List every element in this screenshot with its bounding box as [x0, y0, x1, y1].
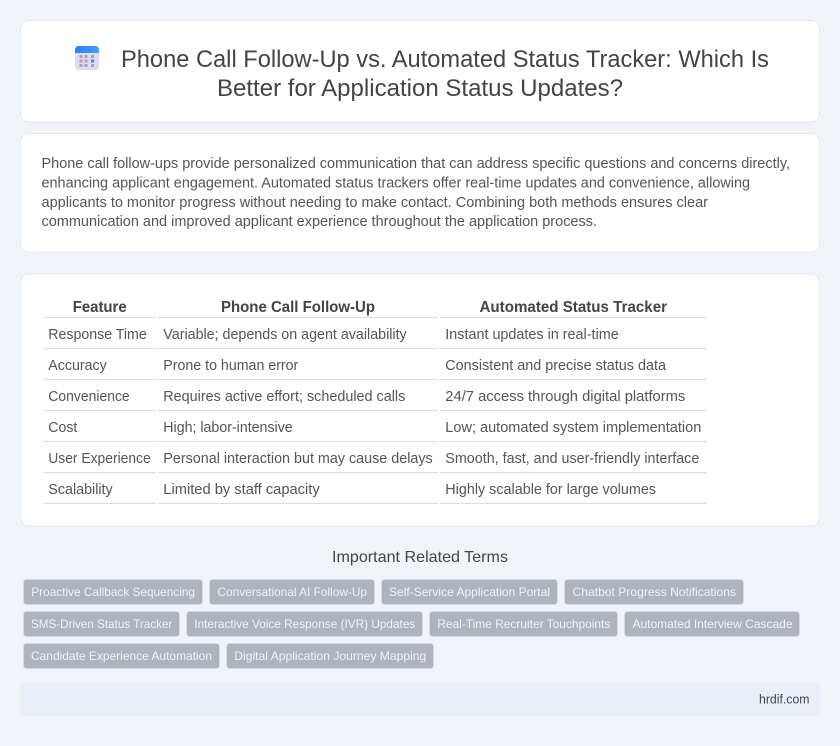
table row: scalability: Scalability — [48, 482, 113, 498]
table row: convenience: 24/7 access through digital platforms — [445, 389, 685, 405]
text block: summary: applicants to monitor progress without needing to make contact. Combining both methods ensures clear — [42, 195, 708, 211]
table row: accuracy: Consistent and precise status data — [445, 358, 666, 374]
table row: response time: Response Time — [48, 327, 147, 343]
table row: response time — [48, 327, 619, 343]
table row: accuracy: Accuracy — [48, 358, 107, 374]
text block: summary: Phone call follow-ups provide personalized communication that can address specific questions and concerns directly, — [42, 156, 790, 172]
chip: Proactive Callback Sequencing — [24, 580, 202, 604]
table row: scalability — [48, 482, 656, 498]
chip: Chatbot Progress Notifications: Chatbot Progress Notifications — [572, 585, 736, 599]
chip: Conversational AI Follow-Up — [210, 580, 374, 604]
chip: Self-Service Application Portal: Self-Service Application Portal — [389, 585, 550, 599]
title — [121, 46, 769, 102]
table header row: Automated Status Tracker — [480, 299, 667, 316]
icon: calendar — [75, 46, 99, 70]
title: Phone Call Follow-Up vs. Automated Status Tracker: Which Is — [121, 46, 769, 73]
table row: scalability: Highly scalable for large volumes — [445, 482, 656, 498]
table row: accuracy: Prone to human error — [163, 358, 298, 374]
footer source text: hrdif.com — [759, 692, 810, 706]
table row: cost: Low; automated system implementation — [445, 420, 701, 436]
text block: summary: enhancing applicant engagement. Automated status trackers offer real-time updates and convenience, allowing — [42, 176, 750, 192]
table row: user experience: Smooth, fast, and user-friendly interface — [445, 451, 699, 467]
chip: Self-Service Application Portal — [382, 580, 558, 604]
chip: Interactive Voice Response (IVR) Updates — [186, 612, 422, 636]
table header row: Phone Call Follow-Up — [221, 299, 375, 316]
chip: Automated Interview Cascade: Automated Interview Cascade — [632, 617, 793, 631]
text block: summary: communication and improved applicant experience throughout the application process. — [42, 214, 597, 230]
table row: cost: Cost — [48, 420, 77, 436]
chip: Interactive Voice Response (IVR) Updates: Interactive Voice Response (IVR) Updates — [194, 617, 415, 631]
chip: Candidate Experience Automation — [24, 644, 220, 668]
table row: response time: Instant updates in real-time — [445, 327, 619, 343]
heading: important related terms: Important Related Terms — [332, 549, 508, 566]
table row: user experience: User Experience — [48, 451, 151, 467]
table header row — [73, 299, 667, 316]
table row: cost: High; labor-intensive — [163, 420, 293, 436]
table row: user experience: Personal interaction but may cause delays — [163, 451, 433, 467]
panel: comparison table — [20, 274, 820, 526]
chip: Real-Time Recruiter Touchpoints — [430, 612, 618, 636]
table row: convenience — [48, 389, 685, 405]
title: Better for Application Status Updates? — [217, 75, 623, 102]
table row: user experience — [48, 451, 699, 467]
chip: Real-Time Recruiter Touchpoints: Real-Time Recruiter Touchpoints — [437, 617, 610, 631]
chip: Conversational AI Follow-Up: Conversational AI Follow-Up — [218, 585, 367, 599]
chip: SMS-Driven Status Tracker — [24, 612, 180, 636]
chip: SMS-Driven Status Tracker: SMS-Driven Status Tracker — [31, 617, 172, 631]
panel: header — [20, 20, 820, 122]
table row: cost — [48, 420, 701, 436]
table header row: Feature — [73, 299, 127, 316]
chip: Chatbot Progress Notifications — [564, 580, 744, 604]
text block: summary — [42, 156, 790, 230]
chip: Digital Application Journey Mapping: Digital Application Journey Mapping — [234, 649, 426, 663]
footer bar — [20, 682, 820, 716]
table row: accuracy — [48, 358, 666, 374]
table row: scalability: Limited by staff capacity — [163, 482, 321, 498]
chip: Candidate Experience Automation: Candidate Experience Automation — [31, 649, 212, 663]
panel: related term chips — [24, 580, 800, 668]
table row: response time: Variable; depends on agent availability — [163, 327, 407, 343]
table row: convenience: Requires active effort; scheduled calls — [163, 389, 405, 405]
chip: Automated Interview Cascade — [624, 612, 800, 636]
table row: convenience: Convenience — [48, 389, 130, 405]
chip: Proactive Callback Sequencing: Proactive Callback Sequencing — [31, 585, 195, 599]
panel: summary paragraph — [20, 134, 820, 252]
chip: Digital Application Journey Mapping — [226, 644, 434, 668]
